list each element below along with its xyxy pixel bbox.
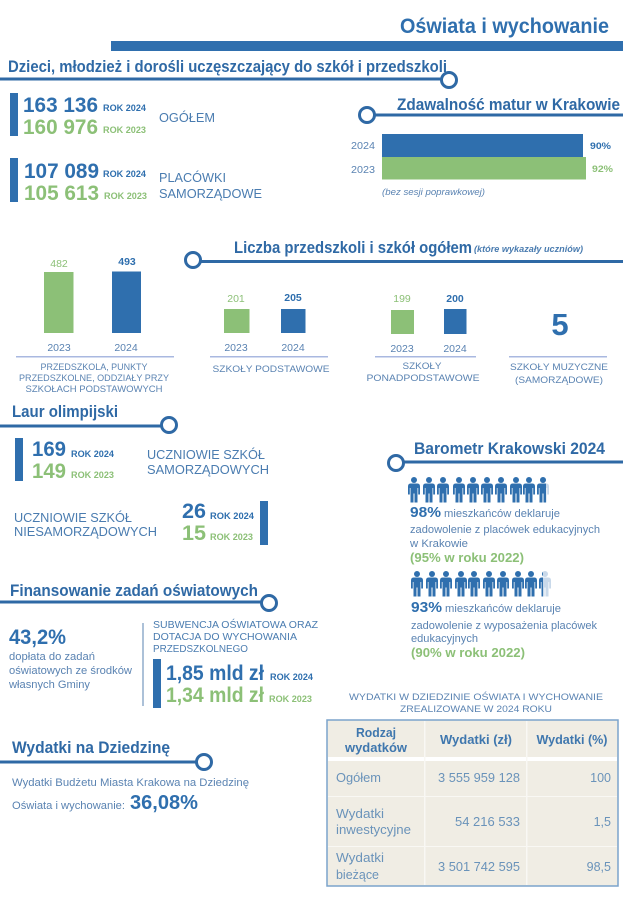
bar chart: preschools: PRZEDSZKOLA, PUNKTY — [40, 362, 148, 373]
title — [111, 15, 623, 51]
stat: total: ROK 2024 — [103, 103, 146, 113]
panel: attendance — [0, 57, 456, 205]
stat: subsidy: DOTACJA DO WYCHOWANIA — [153, 632, 297, 643]
bar chart: secondary schools — [366, 293, 480, 384]
table: Wydatki (%) — [536, 733, 608, 747]
table: 54 216 533 — [455, 815, 520, 829]
heading: schools: Liczba przedszkoli i szkół ogółem — [234, 238, 472, 257]
panel: funding — [0, 581, 318, 708]
heading: attendance — [0, 57, 456, 88]
stat: total: 163 136 — [23, 94, 98, 117]
stat: municipal institutions: SAMORZĄDOWE — [159, 186, 262, 201]
bar chart: primary schools: 201 — [227, 293, 245, 305]
stat: municipal institutions: ROK 2023 — [104, 191, 147, 201]
heading: schools: (które wykazały uczniów) — [474, 244, 583, 254]
bar chart: secondary schools: 2024 — [443, 343, 467, 355]
bar chart: preschools: 482 — [50, 258, 68, 270]
stat: total: OGÓŁEM — [159, 110, 215, 125]
heading: barometer: Barometr Krakowski 2024 — [414, 439, 605, 458]
stat: non-municipal students: 26 — [182, 500, 206, 523]
table: Ogółem — [336, 771, 381, 785]
text: 93% satisfaction: zadowolenie z wyposażenia placówek — [411, 620, 597, 632]
panel: matura pass rate — [351, 95, 623, 197]
stat: non-municipal students: UCZNIOWIE SZKÓŁ — [14, 510, 132, 525]
stat: municipal students: 169 — [32, 438, 66, 461]
table: 1,5 — [594, 815, 611, 829]
bar chart: secondary schools: 2023 — [390, 343, 414, 355]
table — [327, 720, 618, 886]
text: budget share — [12, 777, 249, 814]
panel: spending table — [327, 691, 618, 886]
stat: subsidy: 1,34 mld zł — [166, 684, 264, 707]
bar chart: preschools: SZKOŁACH PODSTAWOWYCH — [26, 384, 163, 395]
text: budget share: Wydatki Budżetu Miasta Krakowa na Dziedzinę — [12, 777, 249, 789]
bar chart: secondary schools: SZKOŁY — [402, 361, 442, 372]
table: 3 555 959 128 — [438, 771, 520, 785]
stat: non-municipal students — [14, 500, 268, 545]
stat: own funds share: dopłata do zadań — [9, 651, 95, 663]
title: Oświata i wychowanie — [400, 15, 609, 38]
bar chart: matura: 2023 — [351, 164, 375, 176]
table: bieżące — [336, 868, 379, 882]
bar chart: secondary schools: 199 — [393, 293, 411, 305]
table: Wydatki (zł) — [440, 733, 512, 747]
bar chart: secondary schools: PONADPODSTAWOWE — [366, 373, 480, 384]
table title: ZREALIZOWANE W 2024 ROKU — [400, 704, 552, 715]
stat: municipal institutions: ROK 2024 — [103, 169, 146, 179]
heading: spending: Wydatki na Dziedzinę — [12, 738, 170, 757]
table: inwestycyjne — [336, 823, 411, 837]
panel: domain spending — [0, 738, 249, 814]
bar chart: primary schools: 2024 — [281, 342, 305, 354]
bar chart: preschools: 2023 — [47, 342, 71, 354]
bar chart: preschools — [16, 256, 174, 395]
stat: municipal students — [15, 438, 269, 483]
stat: subsidy: ROK 2024 — [270, 672, 313, 682]
stat: total — [10, 93, 215, 139]
stat: music schools: (SAMORZĄDOWE) — [515, 375, 603, 386]
stat: subsidy — [153, 618, 318, 708]
bar chart: primary schools: 2023 — [224, 342, 248, 354]
stat: municipal institutions — [10, 158, 262, 205]
text: 98% satisfaction: w Krakowie — [409, 538, 468, 550]
stat: municipal students: ROK 2024 — [71, 449, 114, 459]
table: 98,5 — [587, 860, 611, 874]
bar chart: matura — [351, 134, 614, 180]
stat: subsidy: ROK 2023 — [269, 694, 312, 704]
text: 98% satisfaction: mieszkańców deklaruje — [444, 508, 560, 520]
bar chart: matura: 90% — [590, 141, 612, 152]
stat: municipal institutions: PLACÓWKI — [159, 170, 226, 185]
stat: music schools — [509, 307, 608, 386]
note: matura: (bez sesji poprawkowej) — [382, 187, 485, 197]
text: budget share: Oświata i wychowanie: — [12, 800, 125, 812]
stat: non-municipal students: ROK 2024 — [210, 511, 254, 521]
table: wydatków — [344, 741, 407, 755]
stat: own funds share: oświatowych ze środków — [9, 665, 132, 677]
stat: municipal institutions: 105 613 — [24, 182, 99, 205]
stat: non-municipal students: 15 — [182, 522, 206, 545]
stat: municipal institutions: 107 089 — [24, 160, 99, 183]
stat: total: ROK 2023 — [103, 125, 146, 135]
panel: number of schools — [16, 238, 623, 395]
text: 93% satisfaction: 93% — [411, 600, 442, 616]
table: Wydatki — [336, 807, 384, 821]
stat: subsidy: SUBWENCJA OŚWIATOWA ORAZ — [153, 618, 318, 631]
text: budget share: 36,08% — [130, 792, 198, 814]
bar chart: secondary schools: 200 — [446, 293, 464, 305]
text: 93% satisfaction: edukacyjnych — [411, 633, 478, 645]
stat: own funds share: własnych Gminy — [8, 679, 91, 691]
panel: olympic laurels — [0, 402, 269, 545]
stat: own funds share — [8, 626, 132, 691]
bar chart: matura: 92% — [592, 164, 614, 175]
table title: WYDATKI W DZIEDZINIE OŚWIATA I WYCHOWANIE — [349, 691, 603, 703]
text: 93% satisfaction — [411, 600, 597, 660]
bar chart: preschools: 2024 — [114, 342, 138, 354]
table: 100 — [590, 771, 611, 785]
heading: schools — [186, 238, 623, 268]
text: 93% satisfaction: (90% w roku 2022) — [411, 646, 525, 660]
text: 98% satisfaction: (95% w roku 2022) — [410, 551, 524, 565]
heading: attendance: Dzieci, młodzież i dorośli uczęszczający do szkół i przedszkoli — [8, 57, 447, 76]
text: 98% satisfaction: zadowolenie z placówek edukacyjnych — [410, 524, 600, 536]
icon: people row 93% — [411, 571, 551, 596]
bar chart: primary schools: 205 — [284, 292, 302, 304]
heading: laurels — [0, 402, 176, 432]
bar chart: primary schools: SZKOŁY PODSTAWOWE — [212, 364, 330, 375]
bar chart: preschools: PRZEDSZKOLNE, ODDZIAŁY PRZY — [19, 373, 170, 384]
table title — [349, 691, 603, 715]
heading: laurels: Laur olimpijski — [12, 402, 118, 421]
stat: municipal students: UCZNIOWIE SZKÓŁ — [147, 447, 265, 462]
stat: total: 160 976 — [23, 116, 98, 139]
table: 3 501 742 595 — [438, 860, 520, 874]
stat: music schools: SZKOŁY MUZYCZNE — [510, 362, 608, 373]
stat: municipal students: ROK 2023 — [71, 470, 114, 480]
stat: non-municipal students: NIESAMORZĄDOWYCH — [14, 524, 157, 539]
stat: municipal students: 149 — [32, 460, 66, 483]
heading: funding — [0, 581, 276, 610]
stat: own funds share: 43,2% — [9, 626, 66, 649]
bar chart: matura: 2024 — [351, 140, 375, 152]
text: 98% satisfaction — [409, 505, 600, 565]
table: Rodzaj — [356, 726, 396, 740]
heading: barometer — [388, 439, 623, 470]
heading: spending — [0, 738, 212, 770]
heading: funding: Finansowanie zadań oświatowych — [10, 581, 258, 600]
stat: music schools: 5 — [551, 307, 569, 342]
bar chart: primary schools — [210, 292, 330, 375]
icon: people row 98% — [408, 477, 549, 502]
text: 98% satisfaction: 98% — [410, 505, 441, 521]
stat: municipal students: SAMORZĄDOWYCH — [147, 462, 269, 477]
stat: non-municipal students: ROK 2023 — [210, 532, 253, 542]
heading: matura — [360, 95, 623, 122]
stat: subsidy: PRZEDSZKOLNEGO — [153, 644, 248, 655]
stat: subsidy: 1,85 mld zł — [166, 662, 264, 685]
table: Wydatki — [336, 851, 384, 865]
bar chart: preschools: 493 — [118, 256, 136, 268]
panel: Krakow barometer — [388, 439, 623, 660]
text: 93% satisfaction: mieszkańców deklaruje — [445, 603, 561, 615]
